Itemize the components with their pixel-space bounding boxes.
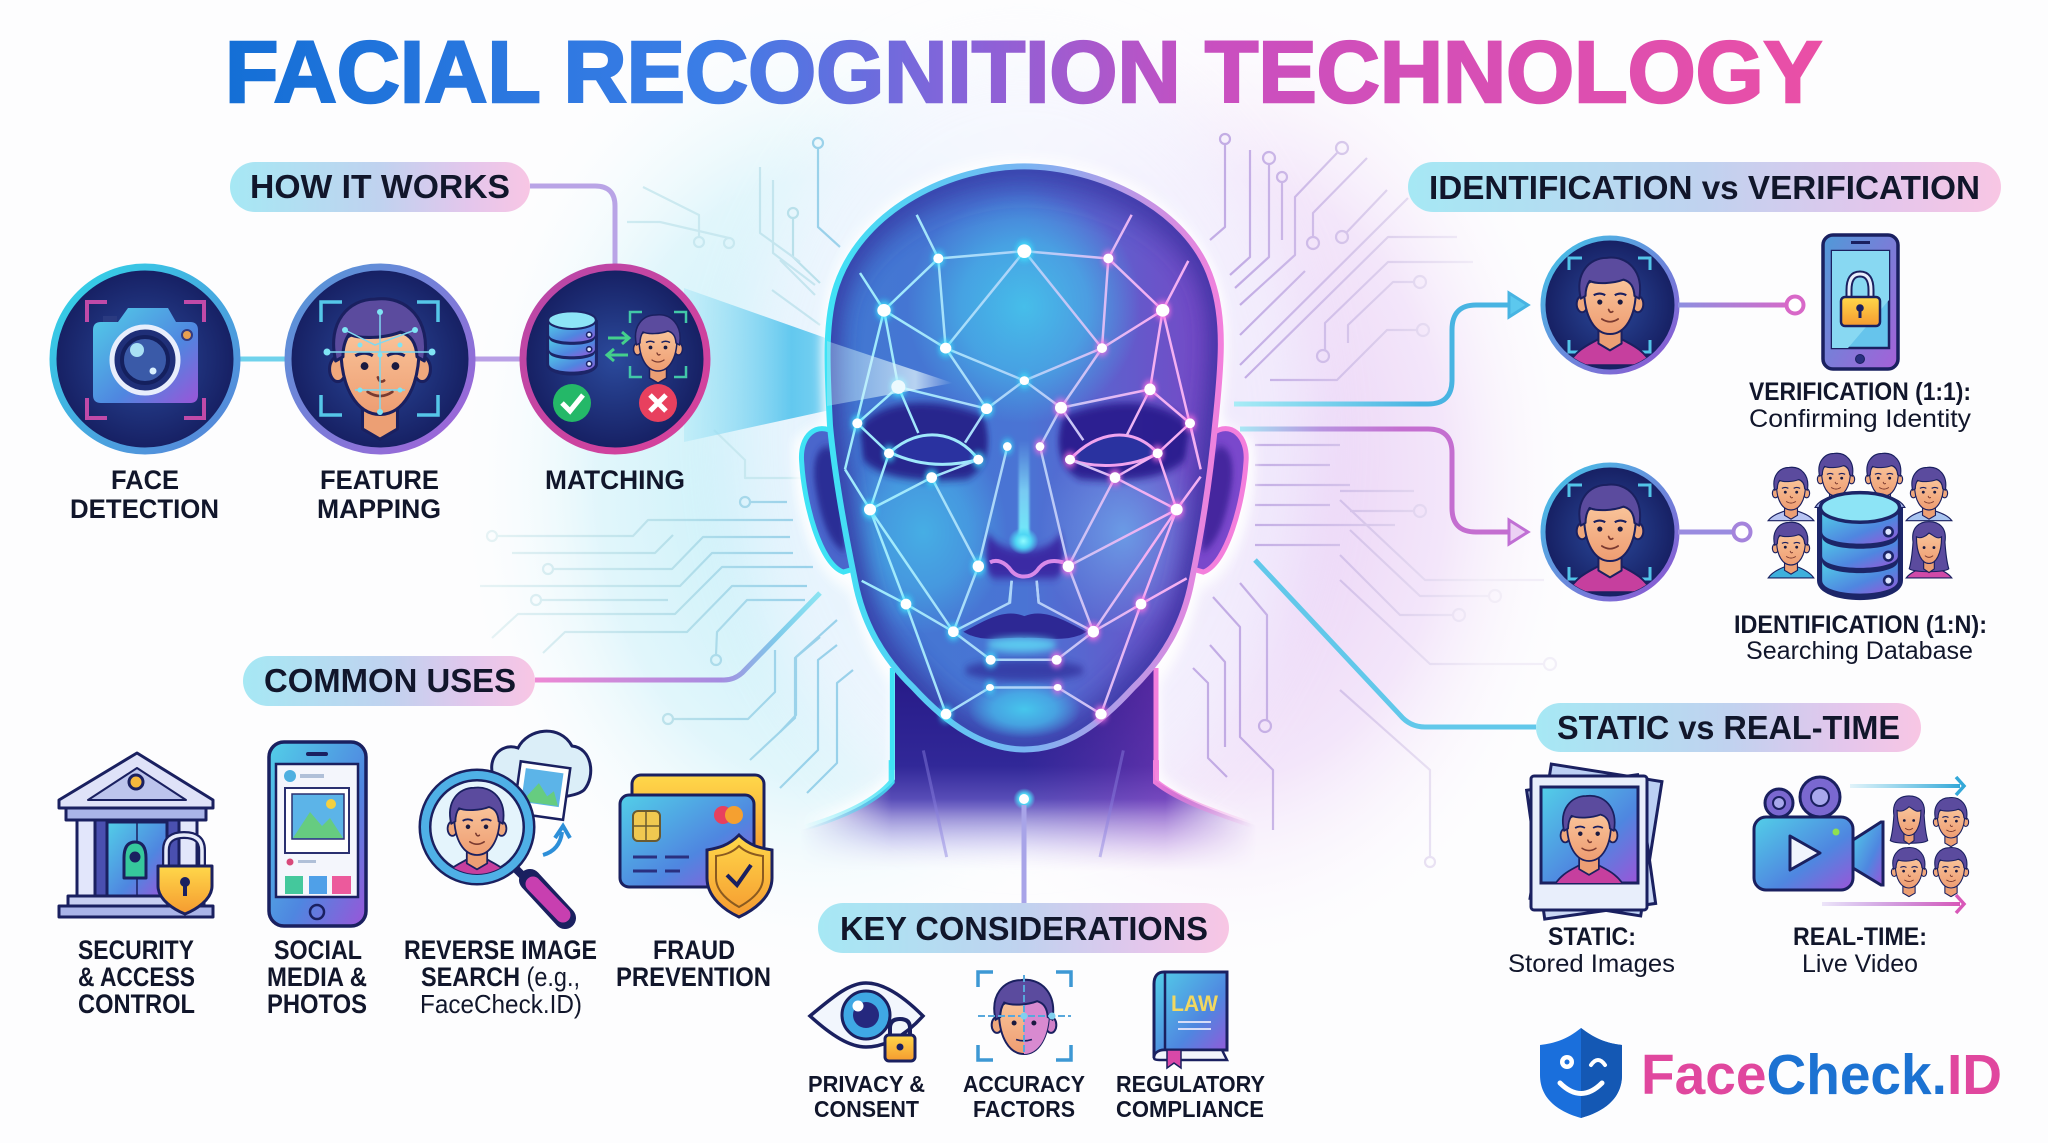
label: COMPLIANCE <box>1116 1096 1264 1122</box>
heading pill: COMMON USES <box>264 662 516 699</box>
face shading <box>828 166 1221 749</box>
step 1 face detection badge <box>53 267 237 451</box>
face base <box>828 166 1221 749</box>
label <box>404 935 597 1019</box>
label: PRIVACY & <box>808 1071 925 1097</box>
connector: step 2 to 3 <box>474 356 520 362</box>
icon: live faces <box>1890 796 1969 897</box>
step 2 feature mapping badge <box>288 267 472 451</box>
label <box>963 1071 1085 1122</box>
eye outlines <box>890 435 1158 465</box>
section: common uses <box>59 656 772 1019</box>
step 2 label: FEATURE <box>320 465 439 495</box>
neck and shoulders <box>807 668 1251 866</box>
verification avatar <box>1543 238 1677 372</box>
label <box>616 935 771 992</box>
icon: bank with lock <box>59 753 213 917</box>
static label: Stored Images <box>1508 950 1675 978</box>
step 2 label <box>317 465 441 524</box>
label: ACCURACY <box>963 1071 1085 1097</box>
lips <box>963 614 1087 652</box>
connector: static vs real-time <box>1255 560 1536 727</box>
neck node core <box>1019 794 1029 804</box>
step 1 label <box>70 465 219 524</box>
connector: common uses <box>535 593 820 680</box>
label: PREVENTION <box>616 962 771 992</box>
label: FRAUD <box>653 935 735 965</box>
static label: STATIC: <box>1548 923 1636 951</box>
icon: social phone <box>269 742 366 926</box>
label <box>78 935 195 1019</box>
mesh nodes cyan <box>852 244 1031 719</box>
heading pill <box>243 656 535 706</box>
verification label: VERIFICATION (1:1): <box>1749 378 1971 406</box>
label: SOCIAL <box>274 935 362 965</box>
step 2 label: MAPPING <box>317 494 441 524</box>
connector: identification <box>1240 429 1512 532</box>
step 1 label: FACE <box>111 465 179 495</box>
identification node <box>1734 524 1750 540</box>
icon: law book <box>1154 972 1227 1068</box>
connector: key considerations <box>1022 805 1026 903</box>
label: CONTROL <box>78 989 195 1019</box>
arrow: top stream <box>1850 777 1964 795</box>
icon: eye with lock <box>810 983 923 1061</box>
heading pill <box>1408 162 2001 212</box>
heading pill <box>230 162 530 212</box>
verification label: Confirming Identity <box>1749 405 1972 433</box>
section: how it works <box>53 162 707 524</box>
icon: law book: LAW <box>1171 991 1218 1016</box>
verification link <box>1678 302 1787 308</box>
wordmark: FaceCheck.ID <box>1641 1043 2002 1107</box>
static label <box>1508 923 1675 978</box>
icon: card and shield <box>620 775 772 917</box>
label: MEDIA & <box>267 962 367 992</box>
arrow head verification <box>1509 293 1528 317</box>
real-time label: REAL-TIME: <box>1793 923 1927 951</box>
arrow head identification <box>1509 520 1528 544</box>
neck node <box>1013 788 1035 810</box>
icon: face accuracy <box>978 972 1071 1060</box>
step 3 matching badge <box>523 267 707 451</box>
real-time label <box>1793 923 1927 978</box>
central head illustration <box>793 159 1257 886</box>
heading pill: KEY CONSIDERATIONS <box>840 910 1208 947</box>
label: REVERSE IMAGE <box>404 935 597 965</box>
icon: video camera <box>1754 777 1883 890</box>
arrow: bottom stream <box>1822 895 1964 913</box>
icon: stored photos <box>1527 764 1662 919</box>
identification label: IDENTIFICATION (1:N): <box>1734 611 1987 639</box>
step 1 label: DETECTION <box>70 494 219 524</box>
label: & ACCESS <box>78 962 195 992</box>
heading pill: HOW IT WORKS <box>250 168 510 205</box>
verification node <box>1786 296 1804 314</box>
ears <box>801 429 1246 572</box>
identification label <box>1734 611 1987 665</box>
label: FACTORS <box>973 1096 1075 1122</box>
title: FACIAL RECOGNITION TECHNOLOGY <box>225 24 1822 121</box>
identification label: Searching Database <box>1746 637 1973 665</box>
heading pill <box>818 903 1229 953</box>
label: REGULATORY <box>1116 1071 1265 1097</box>
real-time label: Live Video <box>1802 950 1918 978</box>
label: SECURITY <box>78 935 194 965</box>
identification link <box>1678 530 1734 534</box>
heading pill <box>1536 703 1921 752</box>
circuit traces right <box>1193 134 1556 867</box>
verification label <box>1749 378 1972 433</box>
heading pill: IDENTIFICATION vs VERIFICATION <box>1429 169 1980 206</box>
label <box>808 1071 925 1122</box>
section: key considerations <box>808 903 1265 1122</box>
label <box>1116 1071 1265 1122</box>
section: static vs real-time <box>1508 703 1969 978</box>
icon: database and people <box>1768 453 1952 600</box>
label: SEARCH (e.g., <box>421 962 580 992</box>
facial mesh lines <box>845 215 1201 714</box>
connector: step 1 to 2 <box>240 356 286 362</box>
icon: phone with lock <box>1823 235 1898 369</box>
label: PHOTOS <box>267 989 367 1019</box>
label: FaceCheck.ID) <box>420 989 582 1019</box>
circuit traces left <box>480 138 853 793</box>
connector: how it works <box>530 186 615 265</box>
label: CONSENT <box>814 1096 920 1122</box>
head rim <box>828 166 1221 749</box>
icon: reverse image search <box>425 731 591 921</box>
head glow halo <box>793 159 1254 823</box>
connector: light beam <box>684 288 953 442</box>
mesh nodes pink <box>1036 254 1195 719</box>
beam highlight over the forehead <box>827 341 953 406</box>
identification avatar <box>1543 465 1677 599</box>
label <box>267 935 367 1019</box>
heading pill: STATIC vs REAL-TIME <box>1557 709 1900 746</box>
step 3 label: MATCHING <box>545 465 685 495</box>
icon: shield smiley <box>1540 1028 1622 1118</box>
logo: FaceCheck.ID <box>1540 1028 2002 1118</box>
connector: verification <box>1234 305 1512 404</box>
section: identification vs verification <box>1408 162 2001 665</box>
nose <box>990 440 1063 603</box>
